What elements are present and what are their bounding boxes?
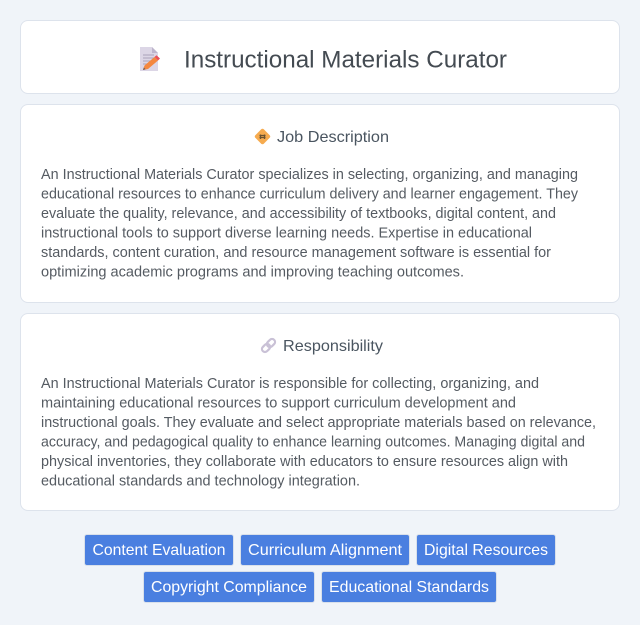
- tag: digital resources: [416, 534, 556, 566]
- heading: job description: Job Description: [277, 129, 389, 146]
- icon: diamond sign: [254, 128, 270, 144]
- responsibility text: maintaining educational resources to support curriculum development and: [41, 396, 516, 412]
- panel: job description: [20, 104, 620, 303]
- icon: document with pencil: [140, 47, 160, 71]
- responsibility text: physical inventories, they collaborate with educators to ensure resources align with: [41, 454, 568, 470]
- job description text: optimizing academic programs and improving teaching outcomes.: [41, 264, 464, 280]
- panel: title: [20, 20, 620, 94]
- responsibility text: instructional goals. They evaluate and select appropriate materials based on relevance,: [41, 415, 596, 431]
- job description text: [41, 167, 579, 280]
- tag: content evaluation: Content Evaluation: [92, 542, 226, 559]
- tag: curriculum alignment: [240, 534, 410, 566]
- job description text: evaluate the quality, relevance, and accessibility of textbooks, digital content, and: [41, 206, 556, 222]
- icon: chain link: [260, 338, 276, 354]
- heading: responsibility: Responsibility: [283, 338, 383, 355]
- title text: Instructional Materials Curator: [184, 46, 507, 74]
- job description text: instructional tools to support diverse learning needs. Expertise in educational: [41, 226, 532, 242]
- tag: educational standards: Educational Standards: [329, 579, 489, 596]
- job description text: educational resources to enhance curriculum delivery and learner engagement. They: [41, 186, 579, 202]
- panel: responsibility: [20, 313, 620, 511]
- responsibility text: educational standards and technology integration.: [41, 474, 360, 490]
- job description text: An Instructional Materials Curator specializes in selecting, organizing, and managing: [41, 167, 578, 183]
- responsibility text: accuracy, and pedagogical quality to enhance learning outcomes. Managing digital and: [41, 434, 585, 450]
- responsibility text: [41, 376, 596, 490]
- tag: digital resources: Digital Resources: [424, 542, 548, 559]
- tag: educational standards: [321, 571, 497, 603]
- tag: copyright compliance: [143, 571, 315, 603]
- tag: content evaluation: [84, 534, 234, 566]
- tag: curriculum alignment: Curriculum Alignment: [248, 542, 403, 559]
- job description text: standards, content curation, and resource management software is essential for: [41, 245, 551, 261]
- responsibility text: An Instructional Materials Curator is responsible for collecting, organizing, and: [41, 376, 539, 392]
- tag: copyright compliance: Copyright Compliance: [151, 579, 307, 596]
